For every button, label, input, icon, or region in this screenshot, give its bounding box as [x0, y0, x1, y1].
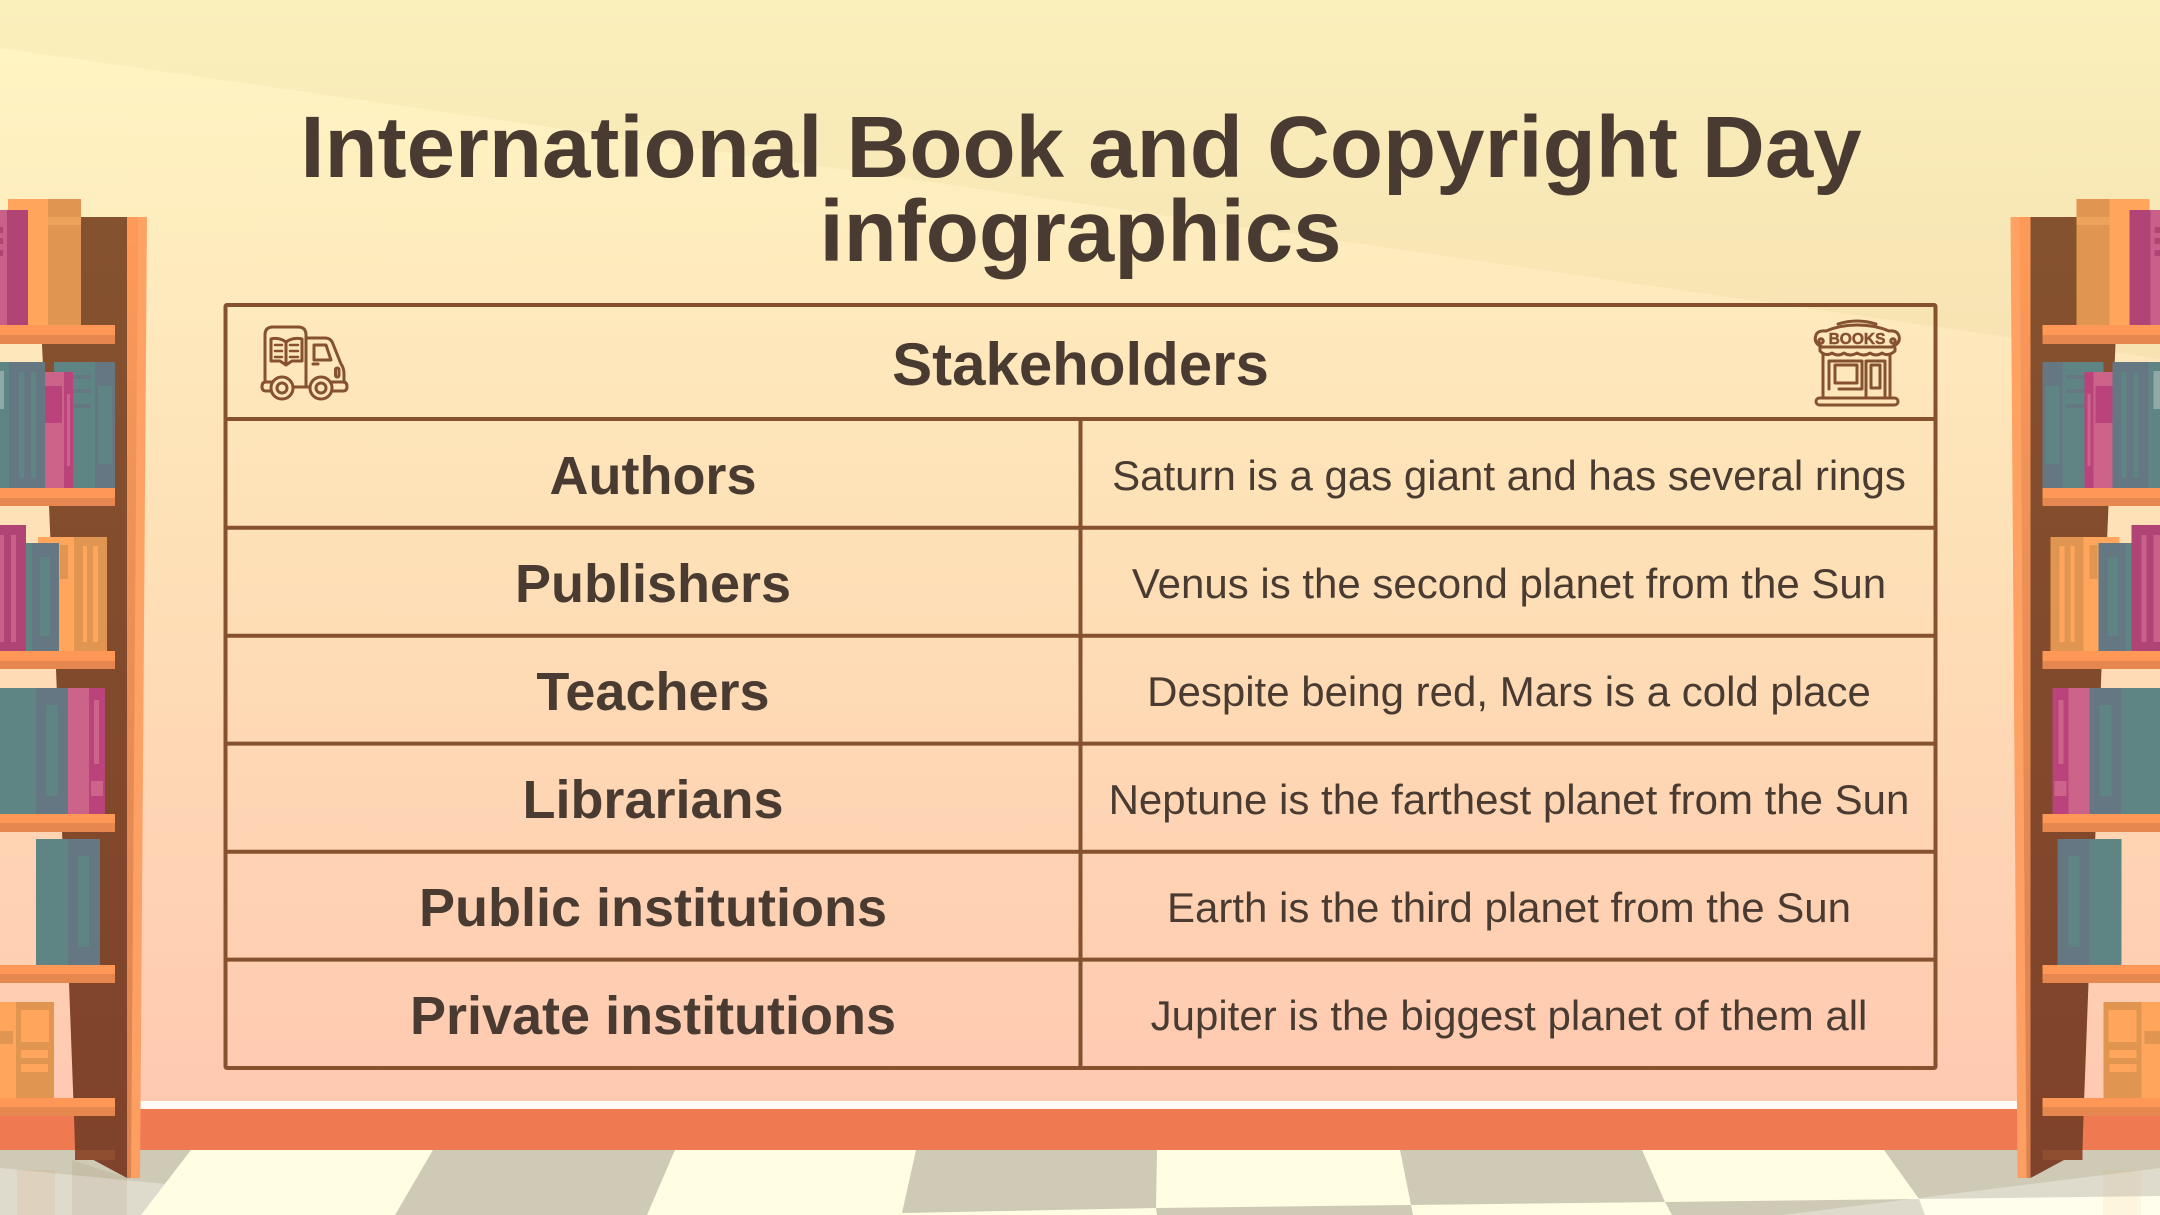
row: Authors	[550, 446, 1906, 506]
books: shelf 5	[36, 839, 100, 965]
icon: bookstore: BOOKS	[1829, 331, 1885, 348]
title: International Book and Copyright Day	[300, 99, 1862, 196]
row: Teachers	[536, 662, 1871, 722]
row: Librarians: Librarians	[522, 770, 784, 830]
title	[300, 99, 1862, 280]
bookcase back panel	[36, 217, 127, 1178]
row: Private institutions: Jupiter is the biggest planet of them all	[1151, 992, 1867, 1039]
row: Private institutions: Private institutions	[410, 986, 896, 1046]
row: Private institutions	[410, 986, 1867, 1046]
row: Teachers: Teachers	[536, 662, 770, 722]
row: Public institutions	[419, 878, 1851, 938]
row: Public institutions: Earth is the third planet from the Sun	[1167, 884, 1851, 931]
icon: book truck	[262, 327, 347, 399]
title: infographics	[819, 183, 1342, 280]
books: shelf 3	[0, 525, 107, 651]
wall baseboard	[0, 1101, 2160, 1150]
books: shelf 1	[0, 199, 81, 325]
stakeholders table	[225, 305, 1936, 1068]
left bookcase	[0, 199, 147, 1178]
bookcase side post	[127, 217, 147, 1178]
checkered floor	[0, 1150, 2160, 1215]
books: shelf 4	[0, 688, 105, 814]
icon: bookstore	[1815, 321, 1899, 405]
row: Librarians: Neptune is the farthest planet from the Sun	[1109, 776, 1909, 823]
right bookcase	[2010, 199, 2160, 1178]
books: shelf 2	[0, 362, 115, 488]
table grid	[225, 305, 1936, 1068]
row: Public institutions: Public institutions	[419, 878, 887, 938]
bookcase foot board	[75, 1150, 115, 1160]
books: shelf 6	[0, 1002, 54, 1098]
row: Authors: Authors	[550, 446, 756, 506]
row: Publishers: Venus is the second planet from the Sun	[1132, 560, 1886, 607]
row: Librarians	[522, 770, 1909, 830]
row: Authors: Saturn is a gas giant and has several rings	[1112, 452, 1906, 499]
row: Teachers: Despite being red, Mars is a cold place	[1147, 668, 1871, 715]
table header: Stakeholders: Stakeholders	[892, 331, 1269, 398]
shelf boards	[0, 325, 115, 1116]
row: Publishers	[515, 554, 1886, 614]
row: Publishers: Publishers	[515, 554, 791, 614]
background light beam	[0, 0, 2160, 359]
